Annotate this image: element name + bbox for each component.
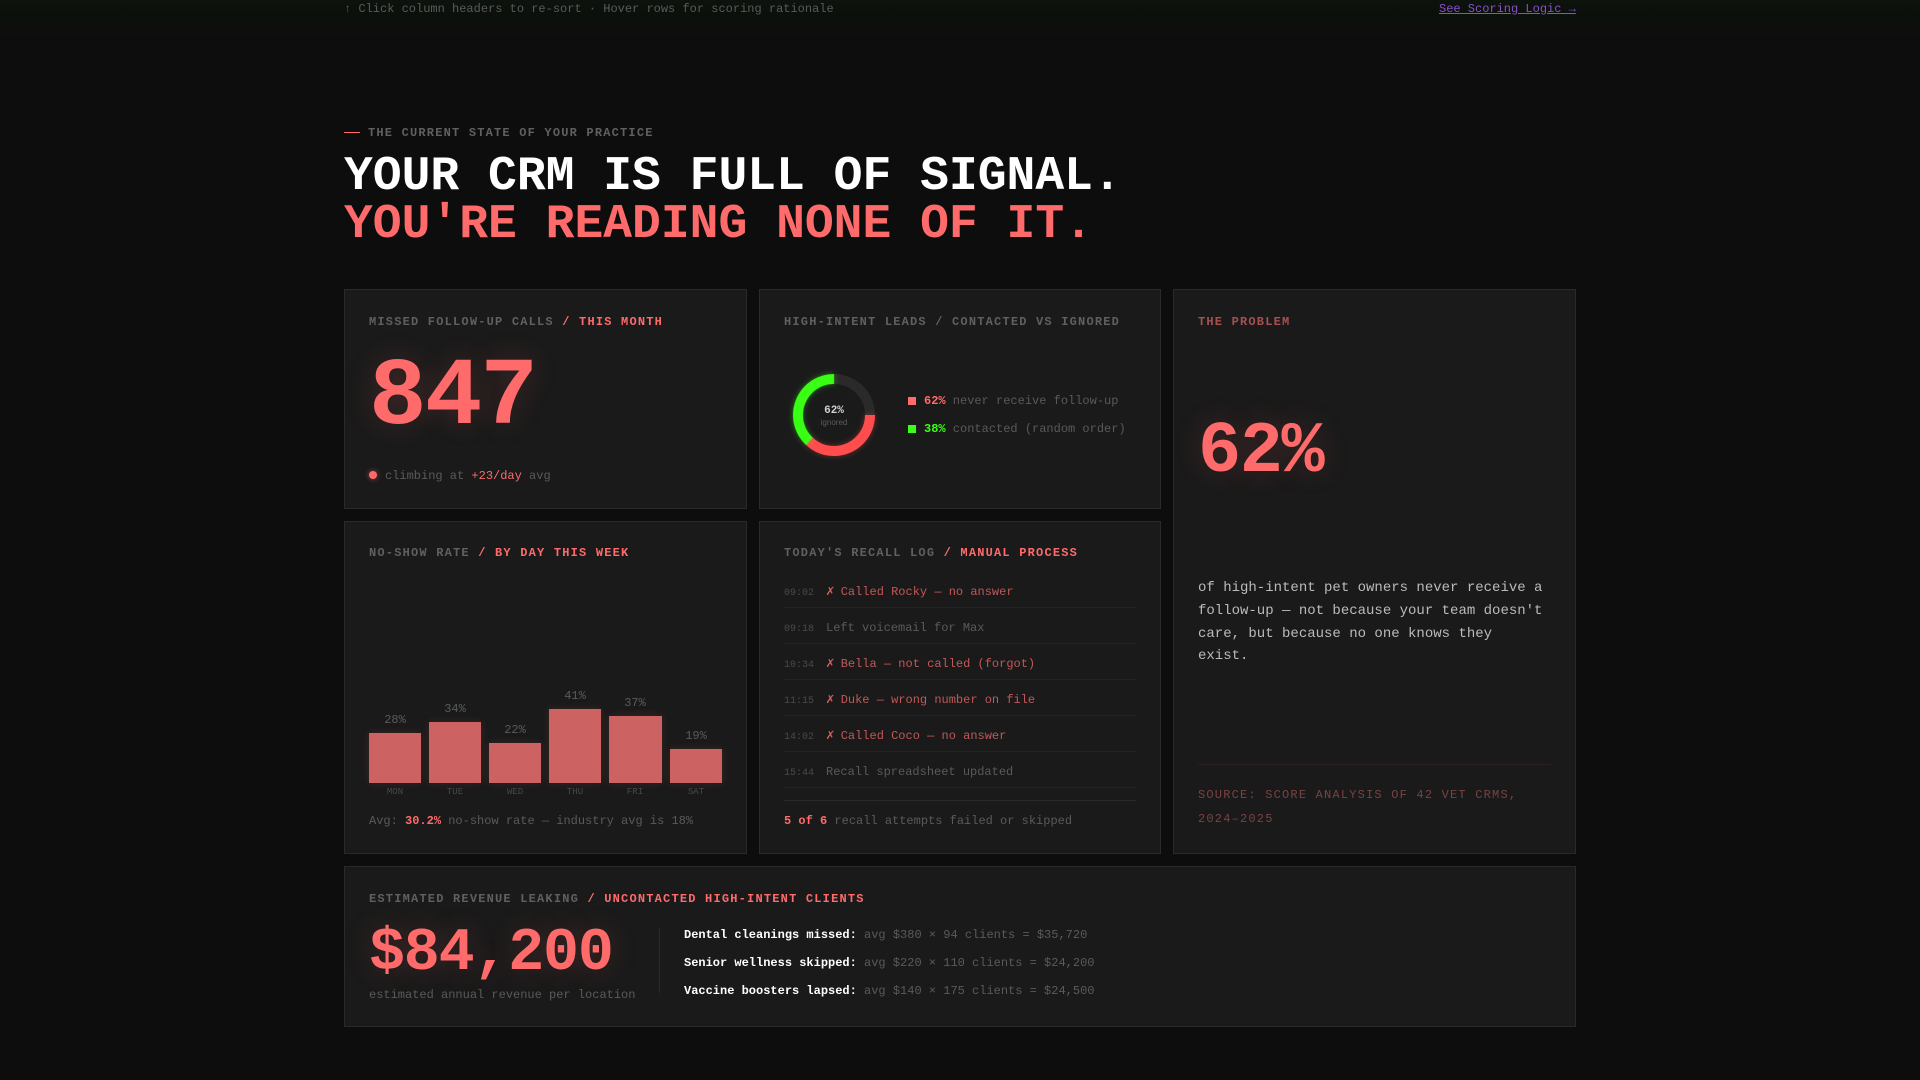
log row 3: Bella — not called (forgot) [841,657,1035,671]
source note [1198,788,1517,826]
log row 1: ✗ [826,584,834,600]
heading: recall log: TODAY'S RECALL LOG / MANUAL PROCESS [784,546,1078,560]
top strip tint [0,0,1920,40]
log row 4: Duke — wrong number on file [841,693,1035,707]
vertical divider [659,928,660,993]
legend: contacted: 38% contacted (random order) [924,422,1126,436]
text: THU [567,787,583,797]
problem statement: exist. [1198,648,1248,664]
log list [784,584,1035,779]
text: 34% [444,702,466,716]
heading: missed calls: MISSED FOLLOW-UP CALLS / THIS MONTH [369,315,663,329]
climbing note: climbing at +23/day avg [385,469,551,483]
text: 28% [384,713,406,727]
bar: Saturday [670,749,722,783]
divider [1198,764,1551,765]
title: YOU'RE READING NONE OF IT. [344,198,1093,252]
line: dental: Dental cleanings missed: avg $380 × 94 clients = $35,720 [684,928,1087,942]
log row 6 [784,752,1136,788]
log row 2 [784,608,1136,644]
log row 5: 14:02 [784,732,814,743]
log row 4: ✗ [826,692,834,708]
panel: missed follow-up calls [344,289,747,509]
donut chart: ignored [821,418,847,427]
text: TUE [447,787,463,797]
problem statement: care, but because no one knows they [1198,626,1492,642]
text: 41% [564,689,586,703]
icon: pulse dot [369,471,377,479]
heading: no-show rate: NO-SHOW RATE / BY DAY THIS WEEK [369,546,629,560]
log row 1: 09:02 [784,588,814,599]
log row 1 [784,572,1136,608]
panel: no-show rate [344,521,747,854]
revenue breakdown [684,928,1094,998]
log row 5: ✗ [826,728,834,744]
top hint text: ↑ Click column headers to re-sort · Hover rows for scoring rationale [344,2,834,16]
text: MON [387,787,403,797]
log row 3: ✗ [826,656,834,672]
source note: 2024–2025 [1198,812,1274,826]
text: SAT [688,787,704,797]
big number 847: 847 [369,343,536,452]
line: vaccine: Vaccine boosters lapsed: avg $140 × 175 clients = $24,500 [684,984,1094,998]
panel: recall log [759,521,1161,854]
bar: Monday [369,733,421,783]
panel: high-intent leads [759,289,1161,509]
heading: revenue leak: ESTIMATED REVENUE LEAKING / UNCONTACTED HIGH-INTENT CLIENTS [369,892,865,906]
panel: the problem [1173,289,1576,854]
log row 4: 11:15 [784,696,814,707]
average note: Avg: 30.2% no-show rate — industry avg is 18% [369,814,693,828]
line: senior: Senior wellness skipped: avg $220 × 110 clients = $24,200 [684,956,1094,970]
log row 2: Left voicemail for Max [826,621,984,635]
heading: high-intent leads: HIGH-INTENT LEADS / CONTACTED VS IGNORED [784,315,1120,329]
log row 6: Recall spreadsheet updated [826,765,1013,779]
problem statement: of high-intent pet owners never receive a [1198,580,1542,596]
revenue caption: estimated annual revenue per location [369,988,635,1002]
problem statement [1198,580,1542,664]
title: YOUR CRM IS FULL OF SIGNAL. [344,150,1122,204]
text: 19% [685,729,707,743]
source note: SOURCE: SCORE ANALYSIS OF 42 VET CRMS, [1198,788,1517,802]
log row 3: 10:34 [784,660,814,671]
big number 62%: 62% [1198,411,1323,493]
log row 6: 15:44 [784,768,814,779]
bar: Wednesday [489,743,541,783]
log summary: 5 of 6 recall attempts failed or skipped [784,814,1072,828]
legend: ignored: 62% never receive follow-up [924,394,1118,408]
bar: Thursday [549,709,601,783]
log row 5 [784,716,1136,752]
heading: the problem: THE PROBLEM [1198,315,1290,329]
bar: Friday [609,716,662,783]
eyebrow: THE CURRENT STATE OF YOUR PRACTICE [368,126,654,140]
bar chart [366,689,724,797]
bar: Tuesday [429,722,481,783]
eyebrow dash [344,132,360,133]
log row 4 [784,680,1136,716]
problem statement: follow-up — not because your team doesn't [1198,603,1542,619]
text: WED [507,787,523,797]
panel: revenue leak [344,866,1576,1027]
text: FRI [627,787,643,797]
text: 37% [624,696,646,710]
text: 22% [504,723,526,737]
log row 1: Called Rocky — no answer [841,585,1014,599]
log row 5: Called Coco — no answer [841,729,1006,743]
divider [784,800,1136,801]
log row 2: 09:18 [784,624,814,635]
donut chart: 62% [824,405,844,417]
log row 3 [784,644,1136,680]
donut chart [790,370,878,460]
title [344,150,1122,252]
link: see scoring logic: See Scoring Logic → [1439,2,1576,16]
big number revenue: $84,200 [369,920,613,988]
